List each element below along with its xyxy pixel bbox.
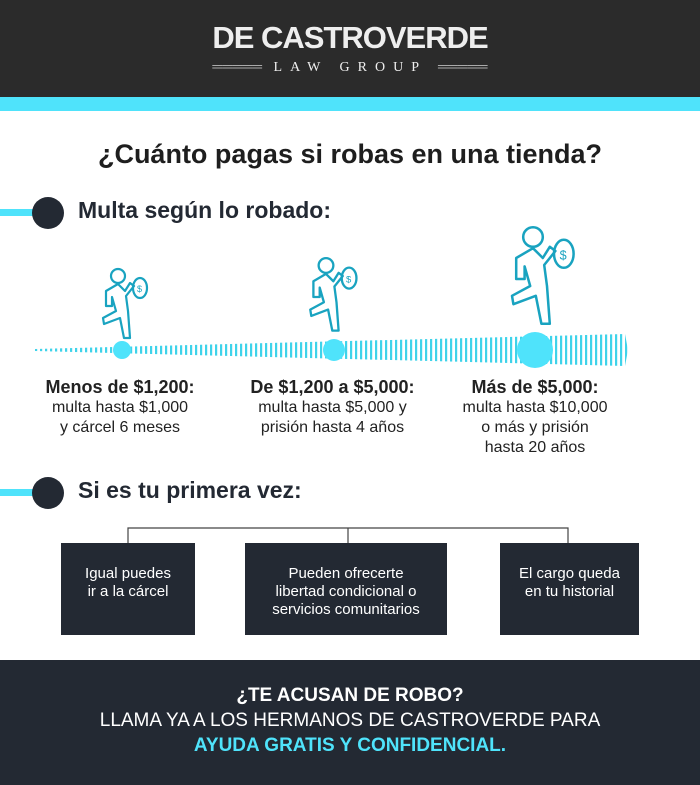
icon: runner small bbox=[103, 269, 147, 338]
label: tier 1 bbox=[45, 377, 195, 436]
label: tier 2: De $1,200 a $5,000: bbox=[250, 377, 415, 397]
timeline chart bbox=[35, 226, 628, 368]
logo bbox=[212, 20, 488, 75]
box 2: libertad condicional o bbox=[276, 583, 416, 600]
label: tier 3: multa hasta $10,000 bbox=[462, 399, 608, 416]
label: tier 3: o más y prisión bbox=[481, 419, 589, 436]
icon: runner medium: $ bbox=[346, 274, 352, 285]
box 3: en tu historial bbox=[525, 583, 614, 600]
logo: ═════ LAW GROUP ═════ bbox=[212, 60, 488, 75]
section heading: primera vez bbox=[0, 477, 302, 509]
logo: DE CASTROVERDE bbox=[212, 20, 488, 55]
label: tier 3: Más de $5,000: bbox=[471, 377, 599, 397]
icon: runner large: $ bbox=[560, 248, 567, 262]
footer: AYUDA GRATIS Y CONFIDENCIAL. bbox=[194, 735, 506, 756]
section heading: multa: Multa según lo robado: bbox=[78, 197, 331, 223]
footer bbox=[0, 660, 700, 785]
icon: runner small: $ bbox=[137, 284, 142, 294]
box 3: El cargo queda bbox=[519, 565, 620, 582]
footer: ¿TE ACUSAN DE ROBO? bbox=[236, 685, 464, 706]
label: tier 3: hasta 20 años bbox=[485, 439, 585, 456]
icon: runner medium bbox=[310, 258, 356, 331]
section heading: primera vez: Si es tu primera vez: bbox=[78, 477, 302, 503]
box 1: Igual puedes bbox=[85, 565, 171, 582]
label: tier 1: multa hasta $1,000 bbox=[52, 399, 188, 416]
header bbox=[0, 0, 700, 97]
section heading: multa bbox=[0, 197, 331, 229]
box 1 bbox=[61, 543, 195, 635]
footer: LLAMA YA A LOS HERMANOS DE CASTROVERDE PARA bbox=[100, 710, 600, 731]
label: tier 2: prisión hasta 4 años bbox=[261, 419, 404, 436]
label: tier 1: y cárcel 6 meses bbox=[60, 419, 180, 436]
label: tier 2 bbox=[250, 377, 415, 436]
box 2 bbox=[245, 543, 447, 635]
connector lines bbox=[127, 527, 569, 543]
title: ¿Cuánto pagas si robas en una tienda? bbox=[98, 139, 602, 169]
label: tier 2: multa hasta $5,000 y bbox=[258, 399, 407, 416]
box 1: ir a la cárcel bbox=[88, 583, 168, 600]
box 2: servicios comunitarios bbox=[272, 601, 420, 618]
box 2: Pueden ofrecerte bbox=[288, 565, 404, 582]
box 3 bbox=[500, 543, 639, 635]
icon: runner large bbox=[512, 227, 574, 324]
label: tier 3 bbox=[462, 377, 608, 456]
label: tier 1: Menos de $1,200: bbox=[45, 377, 195, 397]
